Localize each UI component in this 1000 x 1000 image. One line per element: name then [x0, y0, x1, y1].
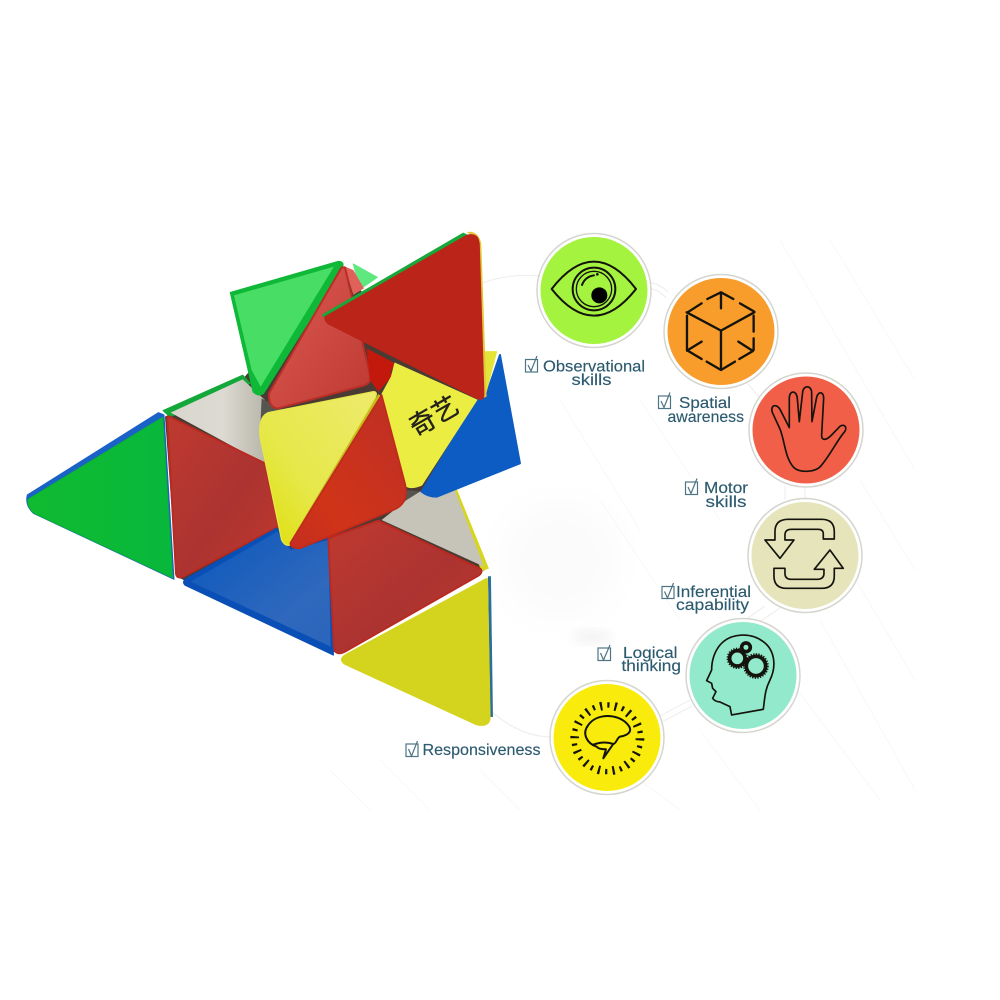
- label: spatial awareness: Spatial: [679, 395, 731, 412]
- piece: upper green triangle: [231, 262, 343, 395]
- icon: brain with rays: [574, 705, 641, 772]
- piece: yellow center: [260, 392, 376, 545]
- piece: grey upper face with green edge: [163, 375, 283, 464]
- badge: red circle: [749, 373, 863, 487]
- skill: observational skills: [526, 234, 651, 389]
- icon: cube with arrows: [687, 292, 754, 370]
- badge: green circle: [537, 234, 651, 348]
- icon: eye: [552, 262, 636, 316]
- label: responsiveness: Responsiveness: [422, 742, 540, 759]
- piece: pink-red triangle: [269, 267, 370, 408]
- skill: responsiveness: [406, 680, 664, 794]
- label: spatial awareness: awareness: [668, 409, 744, 426]
- label: inferential capability: [662, 583, 751, 614]
- label: observational skills: [526, 356, 645, 389]
- label: inferential capability: Inferential: [676, 584, 751, 601]
- piece: yellow logo triangle: [382, 363, 477, 487]
- label: logical thinking: Logical: [623, 645, 678, 662]
- label: observational skills: Observational: [543, 358, 645, 376]
- back piece: small green and pink slivers: [345, 264, 377, 295]
- piece: green left triangle: [27, 413, 174, 579]
- piece: yellow top sliver: [485, 352, 497, 397]
- skill: motor skills: [686, 373, 863, 511]
- piece: blue right triangle: [422, 355, 520, 497]
- label: observational skills: skills: [572, 372, 612, 389]
- label: spatial awareness: [658, 392, 744, 426]
- backing of the cube: [165, 267, 485, 653]
- skill: logical thinking: [598, 618, 800, 732]
- logo: qiyi characters: 奇艺: [404, 390, 464, 442]
- piece: grey lower face with yellow edge: [382, 490, 488, 571]
- pyraminx puzzle cube: [27, 232, 520, 725]
- skill: inferential capability: [662, 498, 862, 614]
- background: faint pattern lines and soft shadow: [330, 240, 915, 810]
- label: motor skills: skills: [706, 494, 746, 511]
- badge: yellow circle: [550, 680, 664, 794]
- badge: beige circle: [748, 498, 862, 612]
- badge: teal circle: [686, 618, 800, 732]
- piece: dark red hinge: [367, 348, 398, 392]
- piece: yellow lower triangle: [342, 577, 493, 725]
- piece: red left triangle: [167, 416, 278, 577]
- icon: head with gears: [707, 635, 774, 715]
- label: inferential capability: capability: [676, 597, 749, 614]
- badge: orange circle: [664, 274, 778, 388]
- icon: cycle arrows: [765, 519, 843, 588]
- piece: big red top triangle: [323, 232, 487, 399]
- label: logical thinking: thinking: [622, 658, 681, 675]
- label: motor skills: Motor: [704, 480, 749, 497]
- piece: red center: [289, 394, 406, 548]
- piece: red lower triangle: [328, 521, 481, 653]
- skill: spatial awareness: [658, 274, 778, 426]
- label: motor skills: [686, 478, 749, 511]
- label: logical thinking: [598, 645, 681, 675]
- icon: hand: [772, 387, 846, 471]
- piece: blue lower triangle: [184, 528, 333, 655]
